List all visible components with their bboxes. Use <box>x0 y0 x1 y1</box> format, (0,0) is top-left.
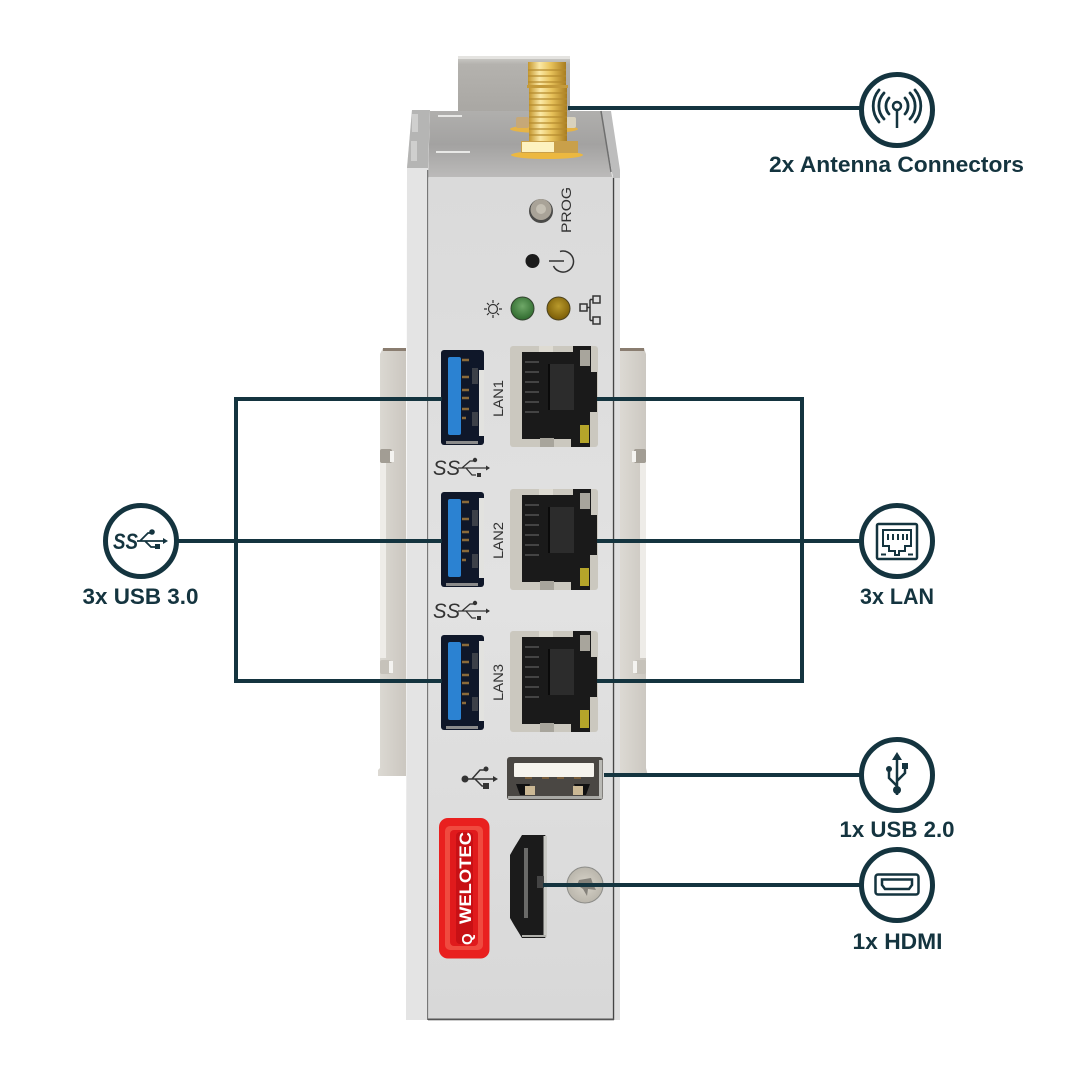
callout: antenna <box>769 74 1024 177</box>
callout: USB 2.0 <box>840 740 954 842</box>
amber LED <box>547 297 570 320</box>
Welotec logo badge: Q <box>459 933 476 945</box>
LAN1 label: LAN1 <box>490 380 506 417</box>
LAN port 2 <box>510 489 598 590</box>
housing front face <box>428 177 613 1019</box>
icon: antenna signal <box>862 74 932 146</box>
PROG button <box>529 199 553 223</box>
rear bracket on top <box>458 56 570 112</box>
LAN port 3 <box>510 631 598 732</box>
callout: USB 3.0 <box>82 506 198 609</box>
icon: SuperSpeed USB silk 2: SS <box>433 600 460 623</box>
USB 3.0 port 2 <box>441 492 484 587</box>
reset hole <box>526 254 540 268</box>
PROG label: PROG <box>558 187 574 233</box>
USB 3.0 port 1 <box>441 350 484 445</box>
mounting screw <box>567 867 603 903</box>
label: HDMI: 1x HDMI <box>852 929 942 954</box>
antenna connectors <box>510 62 583 159</box>
line: USB 3.0 bracket <box>178 399 442 681</box>
icon: SuperSpeed USB silk 1 <box>433 457 490 480</box>
HDMI port <box>510 835 547 938</box>
USB 3.0 port 3 <box>441 635 484 730</box>
line: USB 2.0 <box>604 773 862 777</box>
line: HDMI <box>543 883 862 887</box>
DIN rail bracket right <box>620 348 648 776</box>
icon: SuperSpeed USB silk 2 <box>433 600 490 623</box>
icon: RJ45 socket <box>862 506 932 576</box>
device: industrial PC front view <box>378 56 648 1020</box>
icon: SuperSpeed USB: SS <box>113 529 138 554</box>
label: antenna connectors: 2x Antenna Connectors <box>769 152 1024 177</box>
USB 2.0 port <box>507 757 603 800</box>
icon: sun <box>484 300 502 318</box>
icon: USB trident <box>862 740 932 810</box>
Welotec logo badge <box>439 818 490 958</box>
Welotec logo badge: WELOTEC <box>456 832 475 924</box>
leader lines <box>178 108 862 885</box>
icon: network <box>580 296 600 324</box>
LAN3 label: LAN3 <box>490 664 506 701</box>
icon: power <box>549 251 574 272</box>
DIN rail bracket left <box>378 348 406 776</box>
green LED <box>511 297 534 320</box>
callout: LAN <box>860 506 934 609</box>
housing left side strip <box>406 110 430 1020</box>
top surface engravings <box>436 115 470 153</box>
icon: USB silk <box>462 766 498 789</box>
line: antenna <box>568 106 862 110</box>
icon: HDMI socket <box>862 850 932 920</box>
housing right side strip <box>601 111 620 1020</box>
callout: HDMI <box>852 850 942 954</box>
label: USB 2.0: 1x USB 2.0 <box>840 817 954 842</box>
LAN port 1 <box>510 346 598 447</box>
line: LAN bracket <box>597 399 862 681</box>
label: USB 3.0: 3x USB 3.0 <box>82 584 198 609</box>
icon: SuperSpeed USB silk 1: SS <box>433 457 460 480</box>
label: LAN: 3x LAN <box>860 584 934 609</box>
housing top surface <box>428 111 613 178</box>
LAN2 label: LAN2 <box>490 522 506 559</box>
